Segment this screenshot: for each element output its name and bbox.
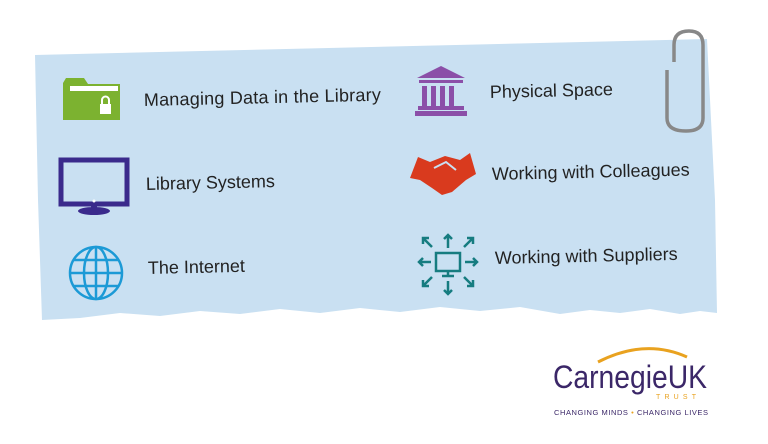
panel: torn paper (35, 39, 717, 320)
text: working with colleagues: Working with Colleagues (492, 160, 690, 184)
icon: folder (63, 78, 120, 120)
logo: Carnegie UK Trust: CHANGING MINDS • CHANGING LIVES (554, 408, 708, 417)
text: the internet: The Internet (148, 256, 245, 278)
icon: globe (70, 247, 122, 299)
logo: Carnegie UK Trust: CarnegieUK (553, 359, 707, 395)
icon: suppliers network (419, 235, 477, 294)
icon: handshake (410, 153, 476, 195)
icon: temple (415, 66, 467, 116)
text: working with suppliers: Working with Suppliers (495, 244, 678, 268)
logo: Carnegie UK Trust (553, 349, 708, 417)
logo: Carnegie UK Trust: TRUST (656, 394, 697, 401)
text: physical space: Physical Space (490, 79, 613, 102)
text: managing data: Managing Data in the Library (144, 85, 381, 110)
icon: paperclip (667, 31, 703, 131)
text: library systems: Library Systems (146, 171, 275, 194)
icon: monitor (61, 160, 127, 215)
